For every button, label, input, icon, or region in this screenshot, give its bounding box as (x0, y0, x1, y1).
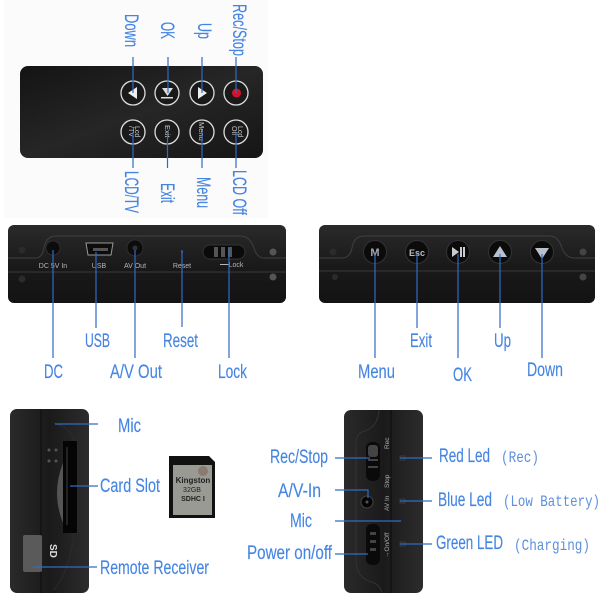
left labels: Power on/off (247, 543, 333, 564)
rear printed text: DC 5V In (39, 263, 67, 270)
printed switch text (384, 437, 391, 558)
remote labels: LCD Off (228, 170, 249, 215)
rear printed text: USB (92, 263, 107, 270)
side labels: Card Slot (100, 476, 161, 497)
front buttons: Esc (409, 248, 425, 258)
printed switch text: Rec (384, 437, 391, 449)
remote pointer lines (133, 57, 236, 168)
printed switch text: Stop (384, 474, 391, 488)
side pointer lines (33, 424, 98, 567)
front labels: Menu (358, 362, 395, 383)
remote labels: LCD/TV (120, 171, 141, 213)
left labels: A/V-In (278, 481, 321, 502)
end device body (344, 410, 423, 593)
front buttons: M (370, 247, 380, 259)
rear ports and switch (46, 240, 245, 259)
rear labels: USB (85, 331, 110, 352)
rear labels: A/V Out (110, 362, 163, 383)
remote buttons: /TV (127, 126, 134, 137)
printed switch text: AV In (384, 495, 391, 511)
remote buttons (121, 81, 248, 144)
front buttons (364, 240, 554, 264)
rear labels: DC (44, 362, 63, 383)
SD card image: 32GB (183, 487, 201, 494)
rec/stop switch (366, 442, 380, 481)
side labels (100, 416, 209, 579)
remote labels: Rec/Stop (228, 4, 249, 56)
panel: device rear ports (8, 225, 286, 383)
remote buttons: Lcd (236, 126, 243, 137)
left labels: Mic (290, 511, 312, 532)
right labels: Green LED (436, 533, 503, 554)
LED indicators (400, 456, 405, 546)
SD card image (169, 456, 215, 518)
end pointer lines (335, 458, 432, 554)
left labels: Rec/Stop (270, 447, 328, 468)
rear printed text: Reset (173, 263, 191, 270)
card slot (57, 441, 77, 533)
printed switch text: →On/Off (384, 532, 391, 558)
remote buttons: Off (230, 126, 237, 135)
remote labels: Menu (192, 177, 213, 208)
A/V-in jack (361, 496, 373, 508)
remote labels (120, 4, 249, 215)
front labels: Exit (410, 331, 432, 352)
remote buttons: Lcd (133, 126, 140, 137)
remote body (20, 66, 263, 158)
side device body (10, 409, 89, 593)
panel: device end with switches and LEDs (247, 410, 600, 593)
rear labels: Lock (218, 362, 247, 383)
right labels: Blue Led (438, 490, 492, 511)
SD card image: Kingston (176, 476, 210, 485)
remote labels: OK (156, 22, 177, 39)
rear printed text: AV Out (124, 263, 146, 270)
rear printed text (39, 262, 244, 270)
panel: device front buttons (319, 225, 595, 386)
front labels: OK (453, 365, 472, 386)
power switch (366, 524, 380, 565)
side labels: Mic (118, 416, 141, 437)
panel: device side with card slot (10, 409, 209, 593)
front labels: Up (494, 331, 511, 352)
rear labels: Reset (163, 331, 199, 352)
front device body (319, 225, 595, 303)
remote receiver window (23, 535, 42, 572)
remote labels: Up (193, 23, 214, 39)
panel: remote control (4, 0, 268, 218)
front pointer lines (375, 254, 542, 358)
side labels: Remote Receiver (100, 558, 209, 579)
right labels (436, 446, 600, 555)
remote buttons: Menu (197, 122, 206, 141)
rear device body (8, 225, 286, 303)
rear printed text: Lock (229, 262, 244, 269)
front labels (358, 331, 563, 386)
right labels: (Rec) (501, 449, 539, 467)
remote buttons: Exit (163, 125, 172, 138)
printed SD: SD (47, 544, 58, 558)
remote labels: Down (120, 14, 141, 47)
rear labels (44, 331, 247, 383)
SD card image: SDHC I (181, 496, 205, 503)
right labels: Red Led (439, 446, 490, 467)
remote labels: Exit (156, 183, 177, 203)
left labels (247, 447, 333, 564)
front labels: Down (527, 360, 563, 381)
rear pointer lines (53, 248, 229, 358)
